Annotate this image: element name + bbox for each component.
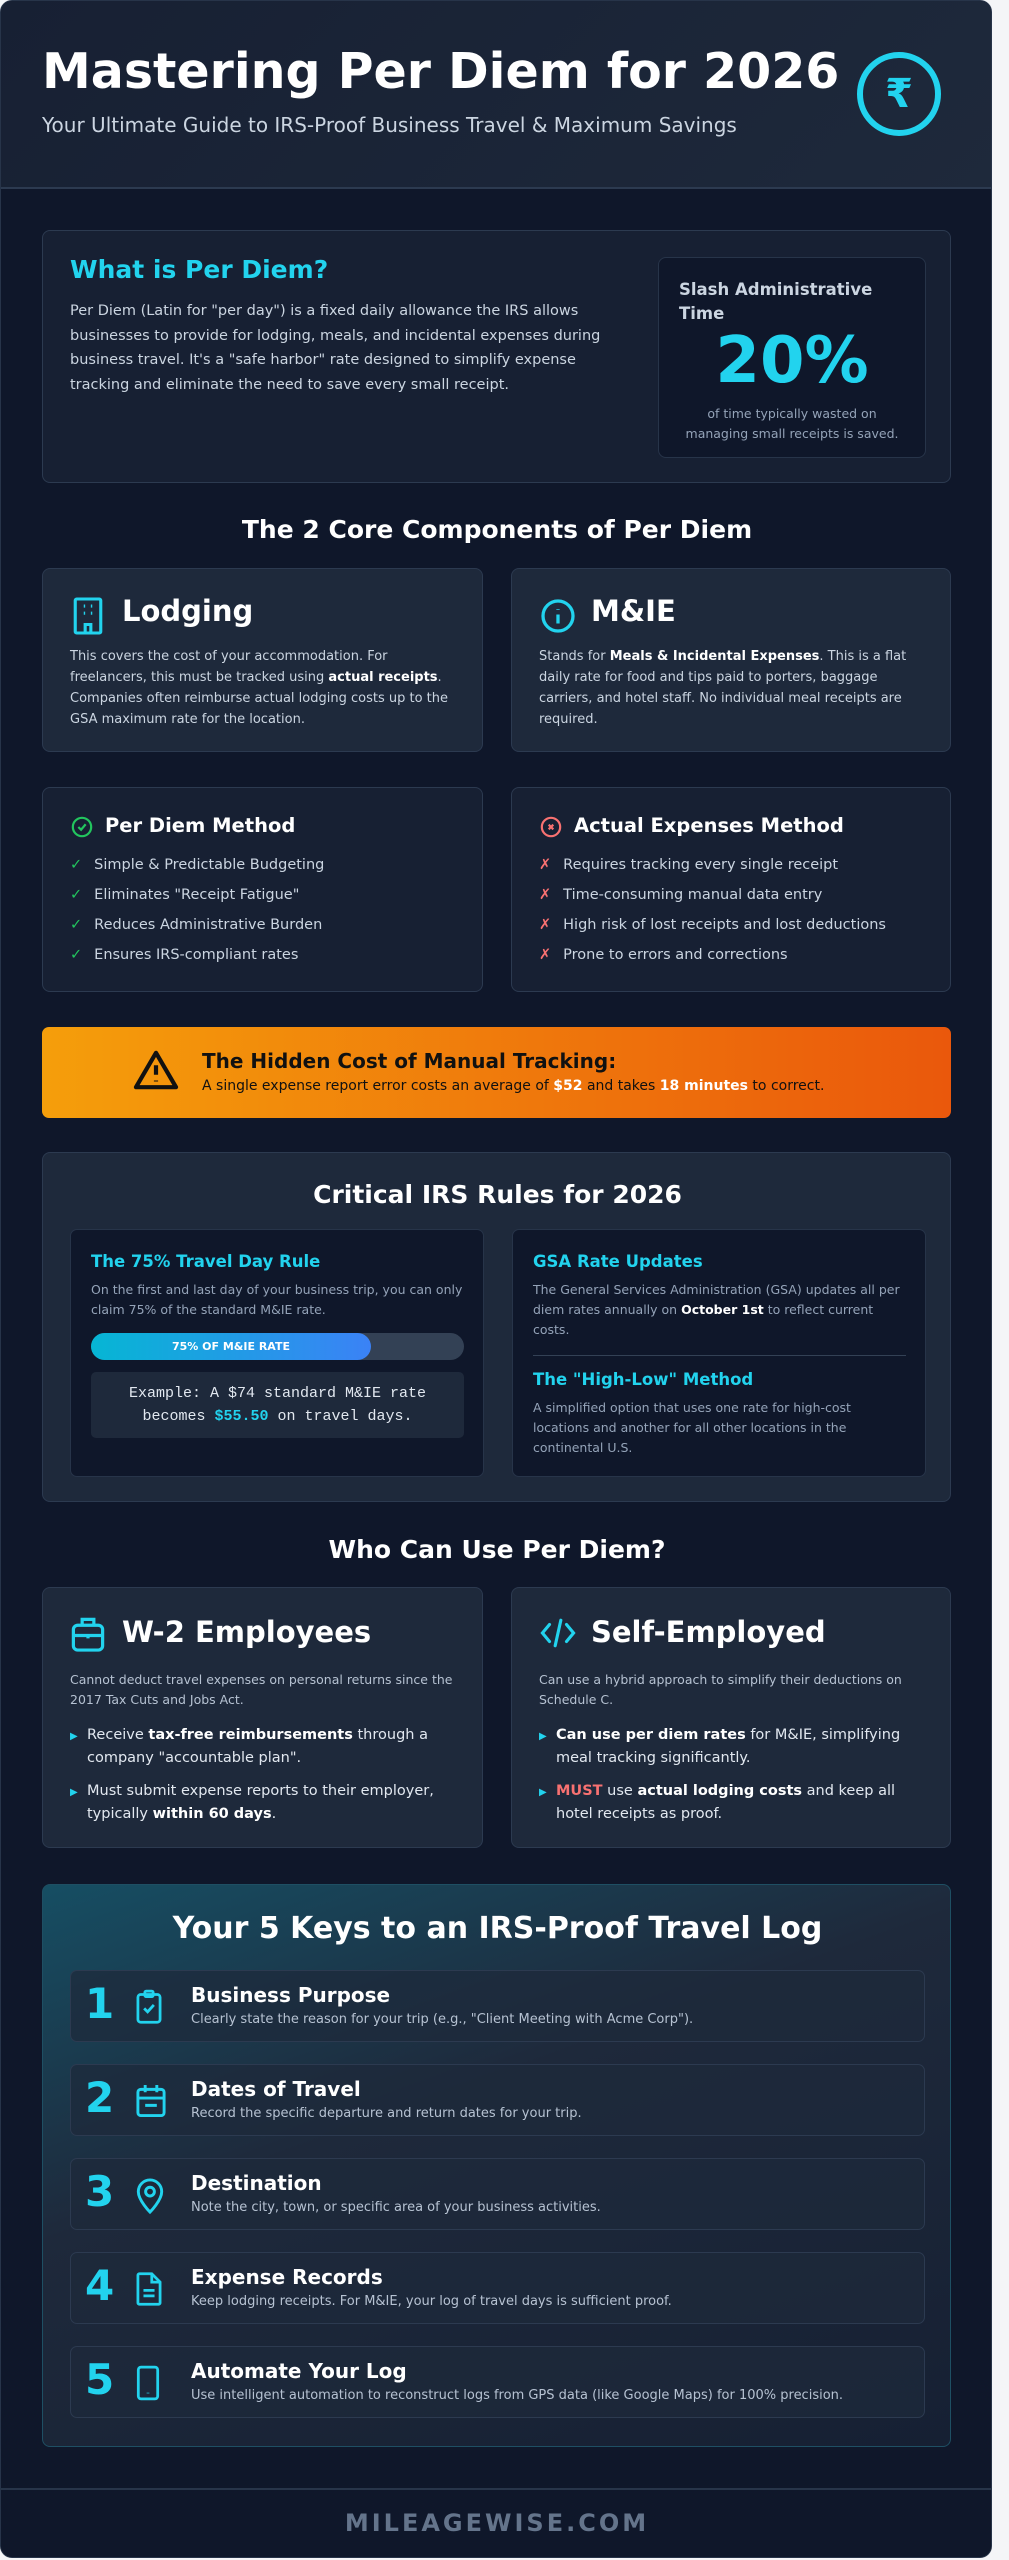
icon: info xyxy=(541,599,575,633)
panel: 5 keys xyxy=(42,1884,951,2447)
heading: Your 5 Keys to an IRS-Proof Travel Log xyxy=(173,1911,822,1946)
list: ✗ Requires tracking every single receipt xyxy=(539,857,838,873)
icon: rupee coin: ₹ xyxy=(885,71,913,117)
row 4: Keep lodging receipts. For M&IE, your log of travel days is sufficient proof. xyxy=(191,2294,672,2309)
heading: Self-Employed xyxy=(591,1615,826,1649)
bullets: ▶ xyxy=(539,1787,547,1798)
icon: building xyxy=(74,598,102,634)
card: 75% rule xyxy=(70,1229,484,1477)
row 5: 5 xyxy=(85,2355,114,2404)
text: Can use a hybrid approach to simplify their deductions on Schedule C. xyxy=(539,1672,902,1707)
card: 75% rule: On the first and last day of your business trip, you can only claim 75% of the standard M&IE rate. xyxy=(91,1282,462,1317)
footer xyxy=(1,2488,993,2560)
heading: Actual Expenses Method xyxy=(574,814,844,837)
stat box: Slash Administrative Time xyxy=(679,280,872,323)
list: ✓ Simple & Predictable Budgeting xyxy=(70,857,324,873)
text: This covers the cost of your accommodation. For freelancers, this must be tracked using actual receipts. Companies often reimburse actual lodging costs up to the GSA maximum rate for the location. xyxy=(70,649,448,727)
bullets: ▶ xyxy=(70,1731,78,1742)
row 1: Business Purpose xyxy=(191,1983,390,2007)
heading: M&IE xyxy=(591,594,676,628)
row 2: Record the specific departure and return dates for your trip. xyxy=(191,2106,582,2121)
panel: per diem method xyxy=(42,787,483,992)
subtitle: Your Ultimate Guide to IRS-Proof Business Travel & Maximum Savings xyxy=(42,113,737,137)
row 4 xyxy=(70,2252,925,2324)
text block: Per Diem (Latin for "per day") is a fixed daily allowance the IRS allows businesses to provide for lodging, meals, and incidental expenses during business travel. It's a "safe harbor" rate designed to simplify expense tracking and eliminate the need to save every small receipt. xyxy=(70,303,600,392)
panel: IRS rules xyxy=(42,1152,951,1502)
row 5: Use intelligent automation to reconstruct logs from GPS data (like Google Maps) for 100% precision. xyxy=(191,2388,843,2403)
heading: What is Per Diem? xyxy=(70,255,328,284)
progress bar xyxy=(91,1333,464,1360)
bullets: MUST use actual lodging costs and keep all hotel receipts as proof. xyxy=(556,1783,895,1822)
panel: self-employed xyxy=(511,1587,951,1848)
icon: phone xyxy=(136,2366,160,2400)
row 4: 4 xyxy=(85,2261,114,2310)
stat box: of time typically wasted on xyxy=(707,406,877,421)
list xyxy=(539,857,886,963)
heading: Lodging xyxy=(122,594,253,628)
panel: W-2 xyxy=(42,1587,483,1848)
header xyxy=(1,1,993,189)
stat box xyxy=(658,257,926,458)
card: GSA & High-Low: The "High-Low" Method xyxy=(533,1370,753,1389)
icon: x circle xyxy=(540,816,562,838)
card: 75% rule: The 75% Travel Day Rule xyxy=(91,1252,320,1271)
heading: W-2 Employees xyxy=(122,1615,371,1649)
heading: The Hidden Cost of Manual Tracking: xyxy=(202,1049,616,1073)
bullets: Must submit expense reports to their employer, typically within 60 days. xyxy=(87,1783,434,1822)
stat box: 20% xyxy=(715,324,869,398)
icon: document xyxy=(136,2272,162,2306)
row 4: Expense Records xyxy=(191,2265,383,2289)
row 2: Dates of Travel xyxy=(191,2077,361,2101)
row 3 xyxy=(70,2158,925,2230)
example xyxy=(91,1372,464,1438)
row 3: Destination xyxy=(191,2171,322,2195)
icon: clipboard xyxy=(136,1990,162,2024)
row 3: 3 xyxy=(85,2167,114,2216)
progress bar: 75% OF M&IE RATE xyxy=(172,1340,290,1353)
icon: warning xyxy=(134,1050,178,1090)
panel: lodging xyxy=(42,568,483,752)
card: GSA & High-Low: A simplified option that uses one rate for high-cost locations and another for all other locations in the continental U.S. xyxy=(533,1400,851,1455)
panel: what is per diem xyxy=(42,230,951,483)
row 2 xyxy=(70,2064,925,2136)
heading: who can use: Who Can Use Per Diem? xyxy=(329,1535,665,1564)
heading: Per Diem Method xyxy=(105,814,295,837)
icon: check circle xyxy=(72,816,92,838)
card: GSA & High-Low xyxy=(512,1229,926,1477)
list xyxy=(70,857,324,963)
bullets xyxy=(539,1727,900,1822)
icon: rupee coin xyxy=(857,52,941,136)
bullets: Receive tax-free reimbursements through a company "accountable plan". xyxy=(87,1727,428,1766)
row 5: Automate Your Log xyxy=(191,2359,407,2383)
icon: briefcase xyxy=(72,1618,104,1652)
icon: calendar xyxy=(136,2085,166,2117)
bullets: Can use per diem rates for M&IE, simplifying meal tracking significantly. xyxy=(556,1727,900,1766)
row 3: Note the city, town, or specific area of your business activities. xyxy=(191,2200,601,2215)
row 2: 2 xyxy=(85,2073,114,2122)
text: Stands for Meals & Incidental Expenses. This is a flat daily rate for food and tips paid to porters, baggage carriers, and hotel staff. No individual meal receipts are required. xyxy=(539,649,906,727)
panel: actual expenses method xyxy=(511,787,951,992)
row 1: 1 xyxy=(85,1979,114,2028)
text: A single expense report error costs an average of $52 and takes 18 minutes to correct. xyxy=(202,1078,824,1094)
bullets xyxy=(70,1727,434,1822)
bullets: ▶ xyxy=(70,1787,78,1798)
footer: MILEAGEWISE.COM xyxy=(345,2509,649,2537)
row 1 xyxy=(70,1970,925,2042)
list: ✗ High risk of lost receipts and lost deductions xyxy=(539,917,886,933)
panel: M&IE xyxy=(511,568,951,752)
icon: map pin xyxy=(136,2178,164,2214)
card: GSA & High-Low: GSA Rate Updates xyxy=(533,1252,703,1271)
text: Cannot deduct travel expenses on personal returns since the 2017 Tax Cuts and Jobs Act. xyxy=(70,1672,452,1707)
row 5 xyxy=(70,2346,925,2418)
bullets: ▶ xyxy=(539,1731,547,1742)
heading: core components: The 2 Core Components of Per Diem xyxy=(242,515,752,544)
card: GSA & High-Low: The General Services Administration (GSA) updates all per diem rates annually on October 1st to reflect current costs. xyxy=(533,1282,900,1337)
row 1: Clearly state the reason for your trip (e.g., "Client Meeting with Acme Corp"). xyxy=(191,2012,693,2027)
title: Mastering Per Diem for 2026 xyxy=(42,43,839,100)
icon: code xyxy=(540,1618,576,1648)
stat box: managing small receipts is saved. xyxy=(686,426,898,441)
list: ✗ Prone to errors and corrections xyxy=(539,947,788,963)
list: ✓ Reduces Administrative Burden xyxy=(70,917,322,933)
callout: hidden cost xyxy=(42,1027,951,1118)
example: becomes $55.50 on travel days. xyxy=(142,1408,413,1425)
example: Example: A $74 standard M&IE rate xyxy=(129,1385,426,1402)
heading: Critical IRS Rules for 2026 xyxy=(313,1180,682,1209)
list: ✓ Ensures IRS-compliant rates xyxy=(70,947,298,963)
list: ✗ Time-consuming manual data entry xyxy=(539,887,822,903)
list: ✓ Eliminates "Receipt Fatigue" xyxy=(70,887,299,903)
